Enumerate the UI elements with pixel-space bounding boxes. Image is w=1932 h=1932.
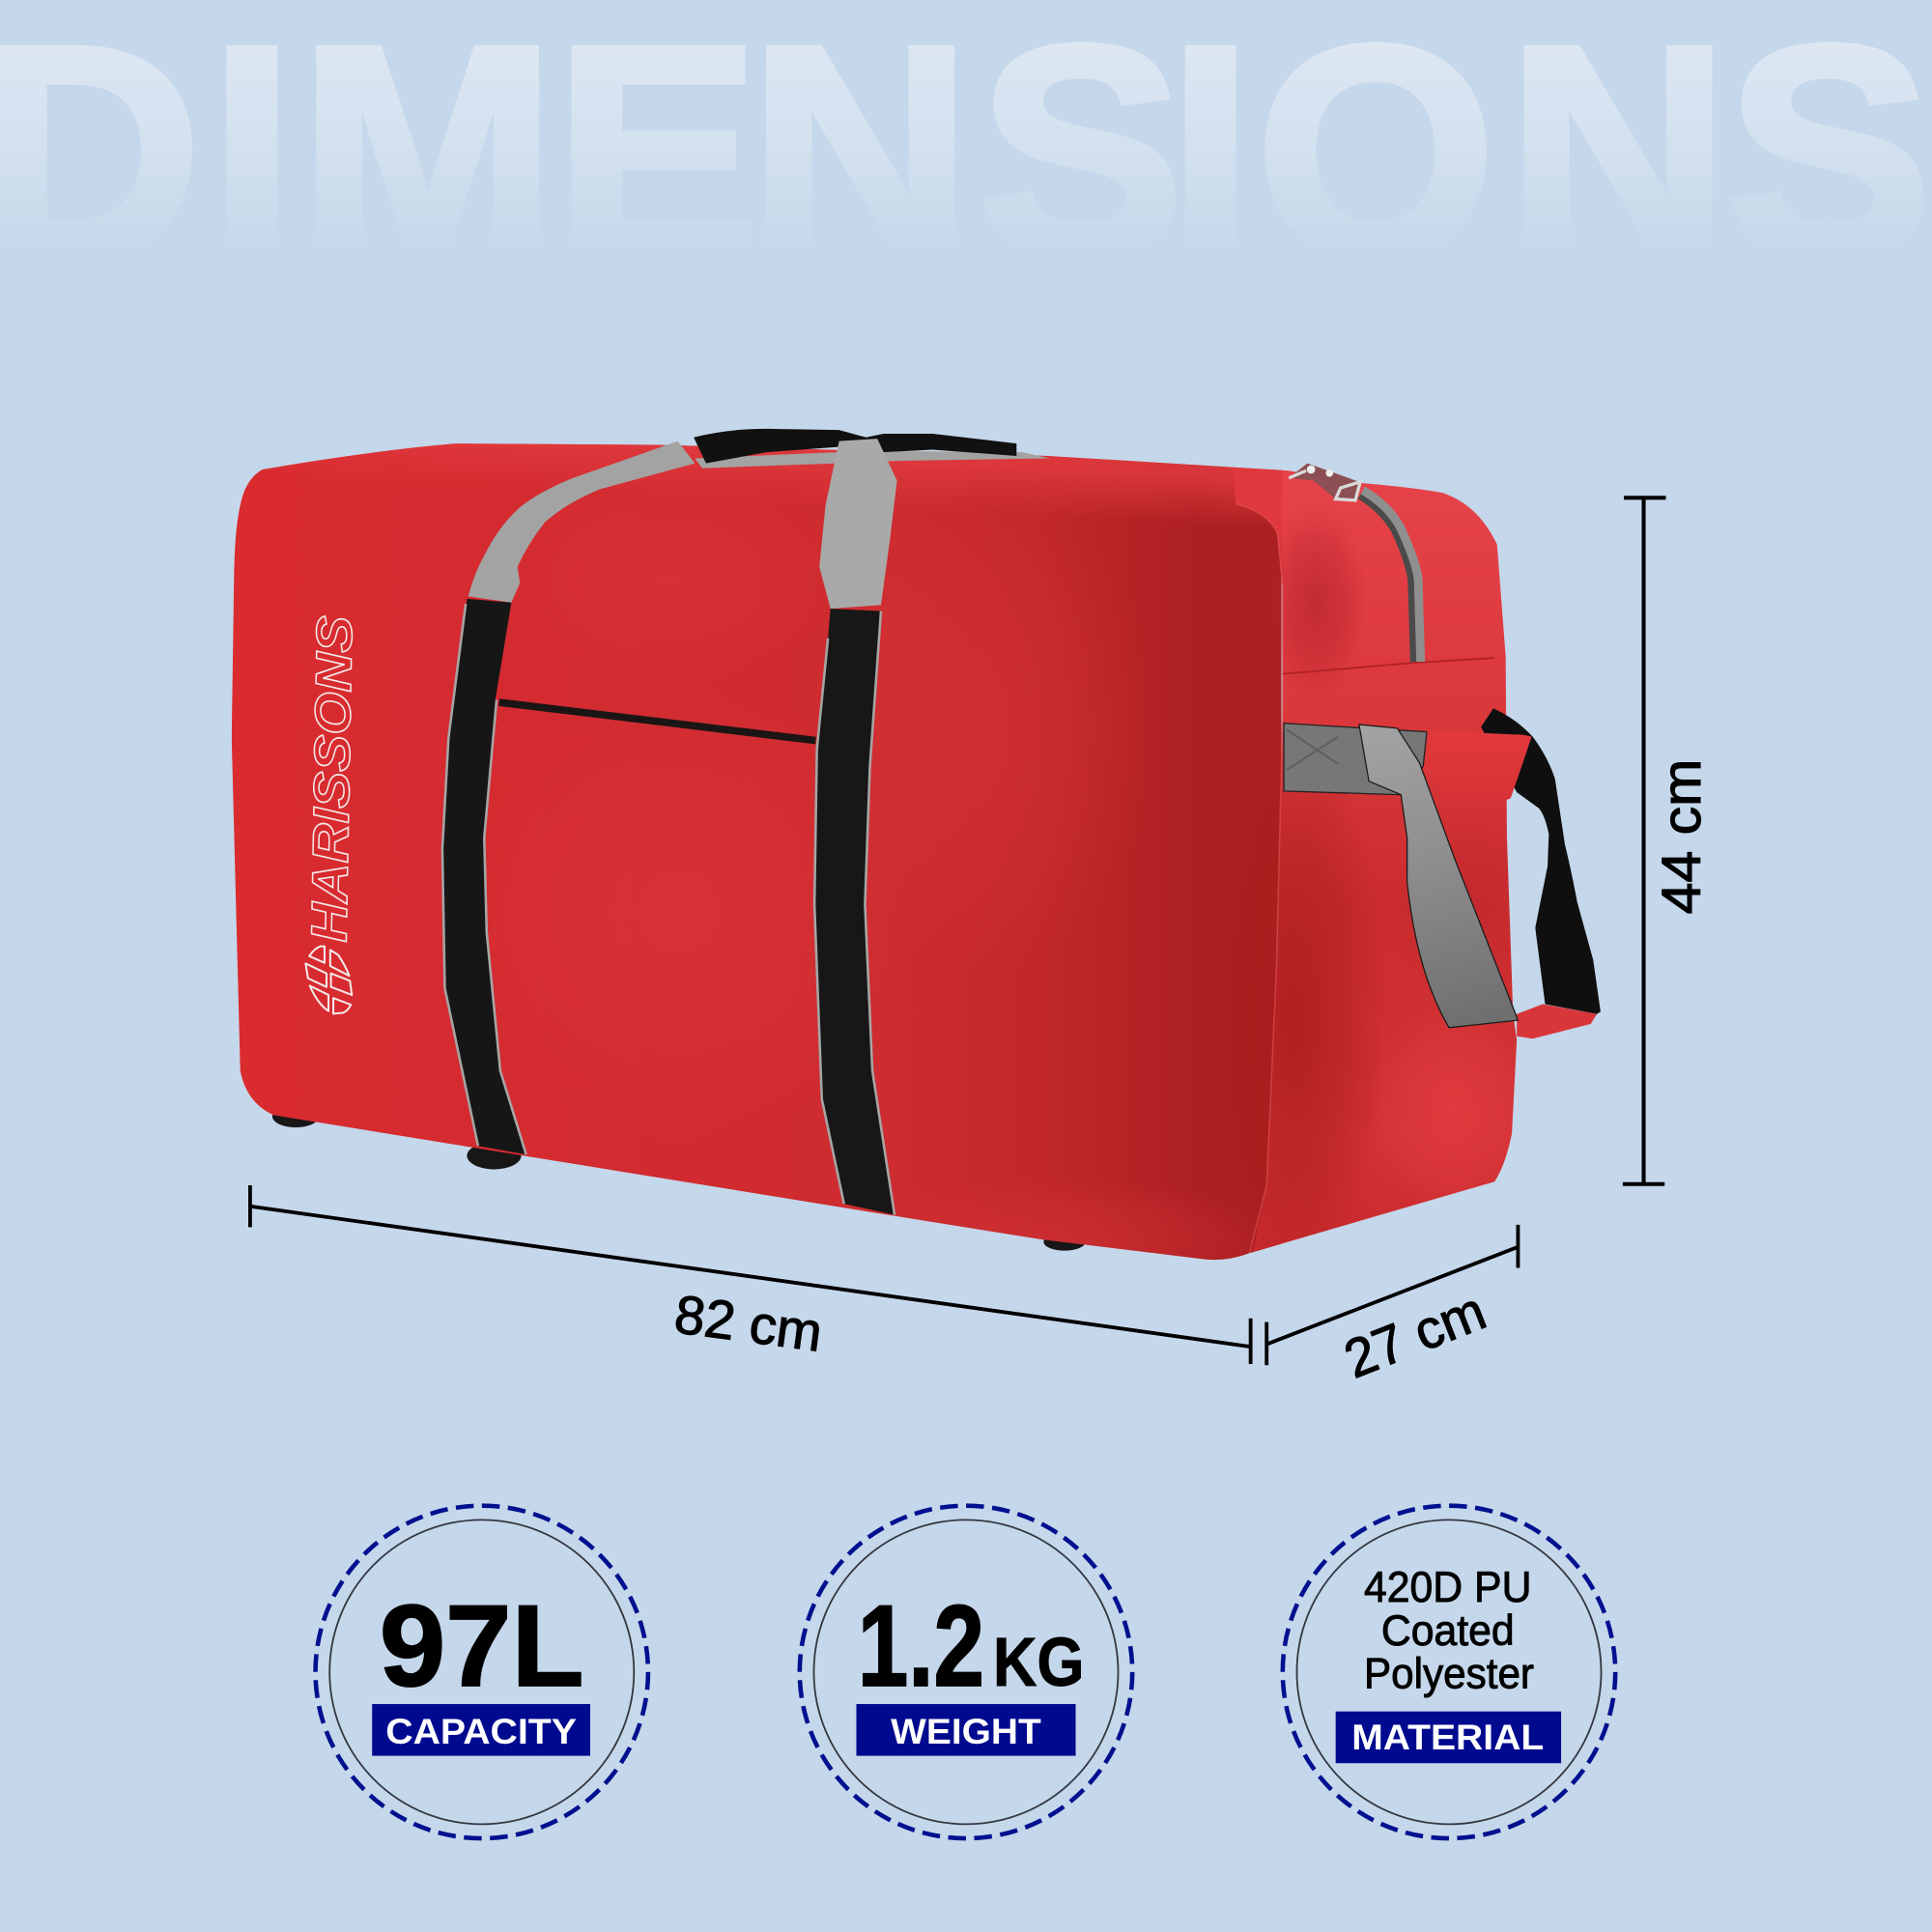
weight value: 1.2 <box>858 1581 984 1711</box>
depth label: 27 cm <box>1336 1280 1493 1389</box>
material value <box>1364 1564 1534 1697</box>
capacity tag <box>372 1704 590 1756</box>
dimension: height 44 cm <box>1623 497 1712 1184</box>
dimension: length 82 cm <box>250 1185 1251 1364</box>
grey webbing right <box>819 439 897 609</box>
length measure line <box>250 1185 1251 1364</box>
capacity rings <box>316 1506 648 1838</box>
height measure line <box>1623 497 1665 1184</box>
badge: capacity <box>316 1506 648 1838</box>
grey strap tail <box>1359 724 1518 1028</box>
depth measure line <box>1266 1225 1518 1365</box>
height label: 44 cm <box>1651 759 1712 914</box>
side strap and loop <box>1284 708 1601 1038</box>
brand logo <box>301 615 363 1013</box>
duffel bag photo <box>222 429 1601 1319</box>
length label: 82 cm <box>671 1283 826 1363</box>
capacity tag label: CAPACITY <box>385 1712 577 1751</box>
material tag label: MATERIAL <box>1351 1718 1544 1757</box>
wordmark HARISSONS: HARISSONS <box>301 615 363 943</box>
front-side corner seam <box>1236 504 1283 1253</box>
grey strip behind handle <box>695 451 1050 469</box>
grey anchor patch <box>1284 724 1427 795</box>
main strap right <box>814 439 897 1215</box>
top panel <box>284 443 1281 519</box>
weight unit: KG <box>993 1624 1084 1701</box>
wheels <box>272 1105 1086 1251</box>
globe emblem <box>305 947 352 1013</box>
badge: weight <box>800 1506 1132 1838</box>
zipper pulls <box>1289 464 1360 500</box>
stitching right <box>814 611 895 1215</box>
black webbing left <box>442 599 526 1154</box>
weight tag <box>856 1704 1076 1756</box>
material value: Coated <box>1381 1607 1515 1655</box>
front face <box>222 431 1282 1282</box>
top corner panel <box>1233 464 1283 586</box>
material value: Polyester <box>1364 1650 1534 1697</box>
side seam line <box>1283 658 1494 674</box>
grey webbing left <box>469 441 695 603</box>
main strap left <box>442 441 695 1154</box>
material rings <box>1283 1506 1615 1838</box>
weight rings <box>800 1506 1132 1838</box>
side panel <box>1249 456 1528 1269</box>
black webbing right <box>814 609 895 1215</box>
fabric shading <box>443 469 1540 1319</box>
top grab handle <box>694 429 1050 469</box>
capacity value: 97L <box>380 1581 584 1711</box>
red handle sleeve <box>1423 730 1531 805</box>
dimension: depth 27 cm <box>1266 1225 1518 1389</box>
pocket opening <box>499 702 815 741</box>
badge: material <box>1283 1506 1615 1838</box>
weight tag label: WEIGHT <box>891 1712 1041 1751</box>
material tag <box>1336 1712 1561 1763</box>
black grip <box>694 429 1016 464</box>
bag body <box>232 443 1517 1260</box>
zipper <box>1289 464 1421 662</box>
stitching left <box>442 604 526 1154</box>
material value: 420D PU <box>1364 1564 1531 1611</box>
side handle black webbing <box>1481 708 1601 1014</box>
side handle lower red edge <box>1517 1005 1597 1038</box>
